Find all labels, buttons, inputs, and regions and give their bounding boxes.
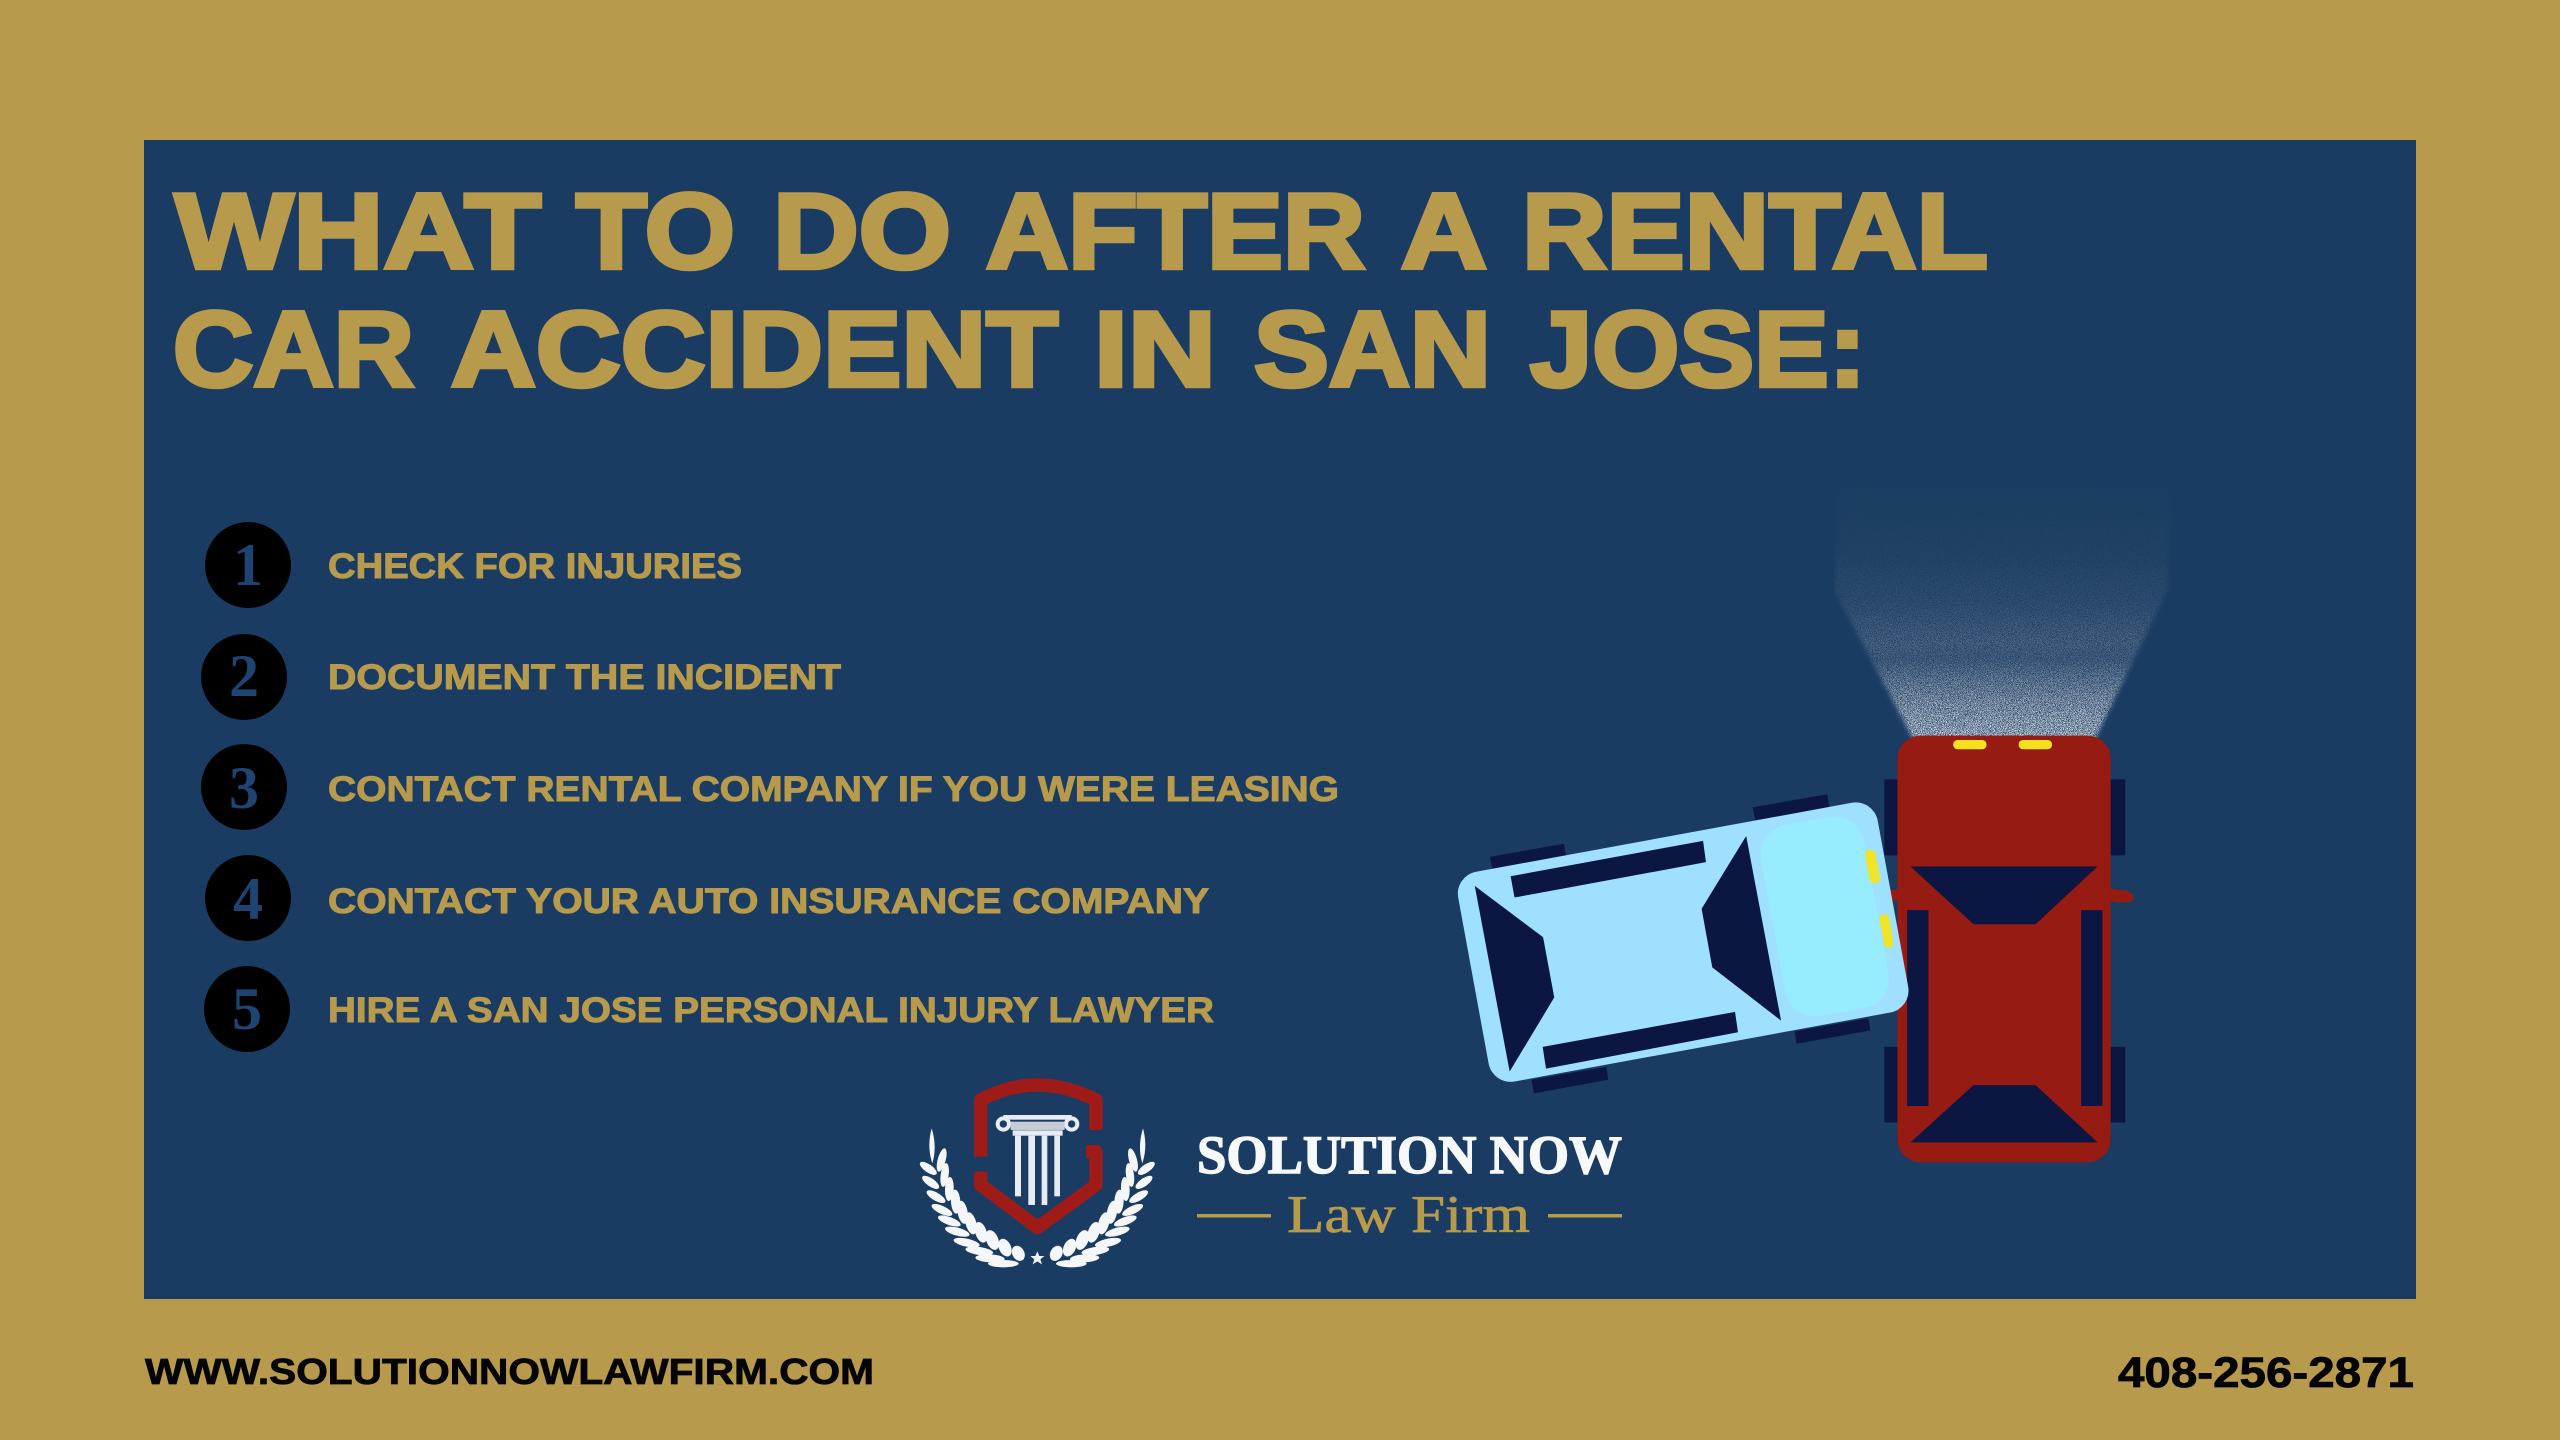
laurel right	[1047, 1128, 1157, 1267]
panel: navy main panel	[144, 140, 2416, 1299]
step 2	[201, 634, 841, 720]
illustration: car crash	[1454, 469, 2172, 1162]
title: IN	[1094, 289, 1216, 409]
step 5: HIRE A SAN JOSE PERSONAL INJURY LAWYER	[328, 991, 1214, 1030]
title: ACCIDENT	[451, 289, 1058, 409]
step 5: 5	[232, 976, 262, 1042]
step 1: 1	[233, 532, 263, 598]
step 1	[205, 522, 742, 608]
title: WHAT	[175, 171, 541, 291]
step 4: CONTACT YOUR AUTO INSURANCE COMPANY	[328, 882, 1209, 921]
headlight beam	[1834, 469, 2172, 740]
step 4: 4	[233, 866, 263, 932]
step 3: CONTACT RENTAL COMPANY IF YOU WERE LEASING	[328, 770, 1339, 809]
step 2: DOCUMENT THE INCIDENT	[328, 658, 841, 697]
red car	[1884, 736, 2134, 1162]
step 4	[205, 855, 1209, 941]
footer: phone: 408-256-2871	[2118, 1349, 2414, 1397]
title: JOSE:	[1530, 289, 1866, 409]
step 5	[204, 966, 1214, 1052]
title: SAN	[1254, 289, 1491, 409]
title: CAR	[173, 289, 414, 409]
logo emblem	[918, 1085, 1157, 1267]
logo subtitle	[1197, 1186, 1622, 1244]
title: A	[1401, 171, 1487, 291]
blue car	[1454, 794, 1912, 1093]
title: AFTER	[986, 171, 1365, 291]
star	[1030, 1251, 1044, 1264]
title: DO	[773, 171, 951, 291]
step 3: 3	[229, 755, 259, 821]
shield	[981, 1085, 1096, 1228]
title	[173, 171, 1988, 409]
logo: Solution Now Law Firm	[918, 1085, 1622, 1267]
title: RENTAL	[1522, 171, 1988, 291]
logo subtitle: Law Firm	[1287, 1186, 1530, 1244]
title: TO	[576, 171, 735, 291]
step 2: 2	[229, 643, 259, 709]
footer: website: WWW.SOLUTIONNOWLAWFIRM.COM	[145, 1351, 874, 1392]
pillar	[998, 1115, 1077, 1205]
laurel left	[918, 1128, 1027, 1267]
step 1: CHECK FOR INJURIES	[328, 547, 742, 586]
logo name: SOLUTION NOW	[1197, 1125, 1622, 1185]
step 3	[201, 744, 1339, 830]
